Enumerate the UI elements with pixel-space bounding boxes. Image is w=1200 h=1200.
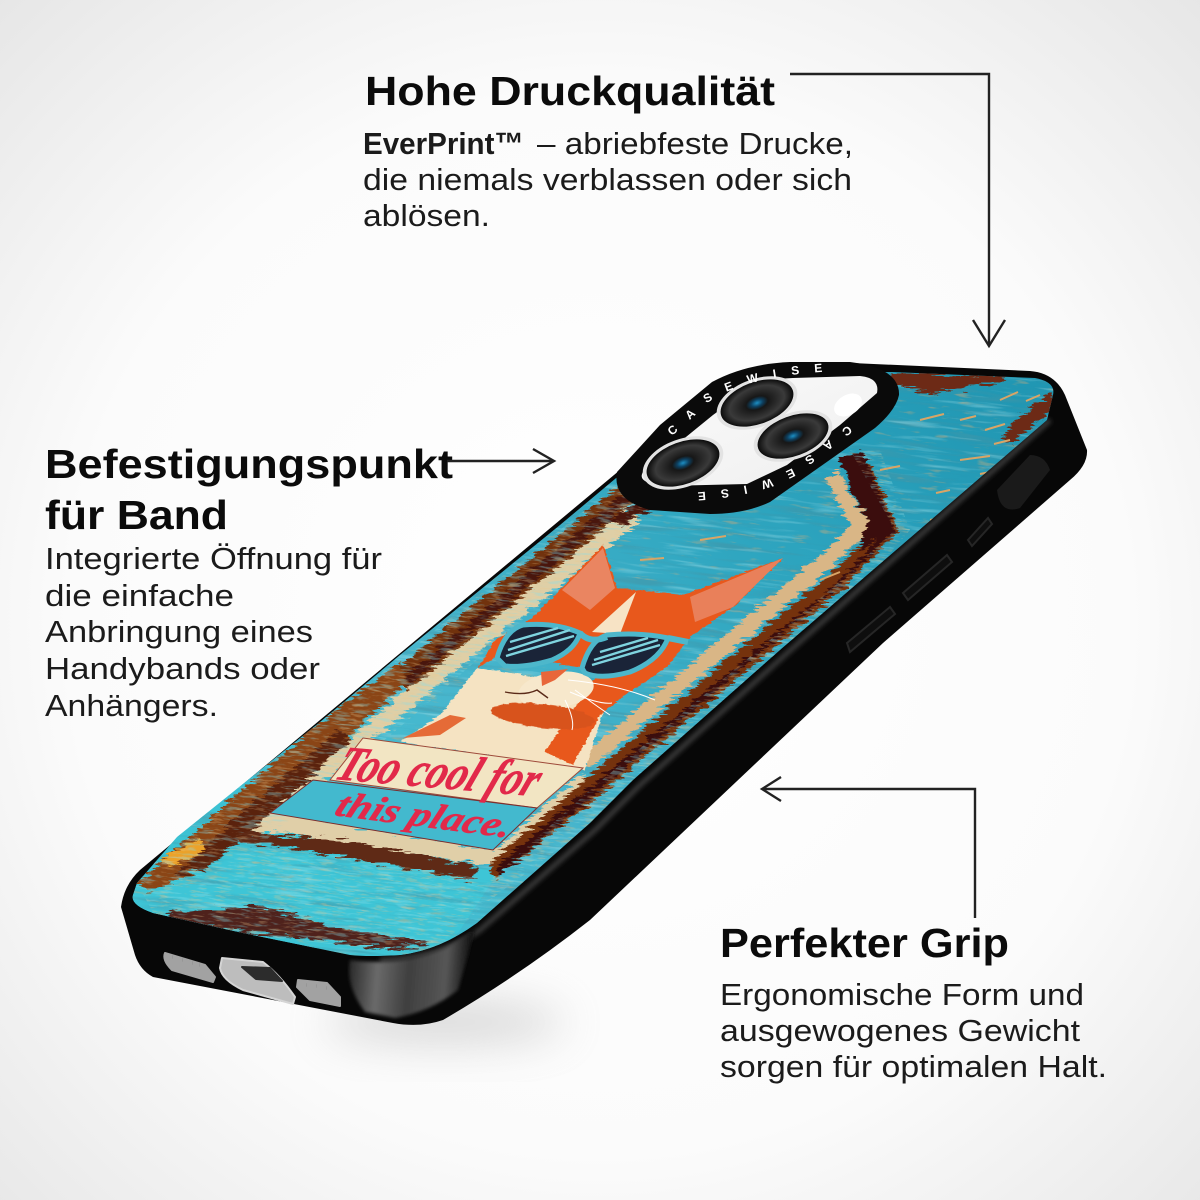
text block: – abriebfeste Drucke, [537,126,853,161]
lens right [747,400,839,472]
arrow: strap attachment [447,449,554,473]
callout: print quality [363,68,853,233]
cat ears light [562,548,615,610]
teal sign panel [270,780,537,850]
sunglasses right lens [582,634,668,676]
text block: sorgen für optimalen Halt. [720,1049,1107,1084]
phone drop shadow [325,1002,565,1042]
tan inner frame [245,505,640,835]
arch rust core [838,449,885,551]
forehead stripe [592,592,636,634]
heading: Perfekter Grip [720,920,1009,966]
arrow: print quality [790,74,1005,346]
callout: strap attachment [45,441,453,723]
ring lettering lower: CASEWISE [698,426,852,500]
shoulder marking [403,715,466,738]
bottom ports [164,953,340,1006]
lower cream frame [240,775,592,866]
cream sign panel [330,738,583,808]
painted teal base [132,372,1054,956]
flash [830,389,866,421]
text block: Ergonomische Form und [720,977,1084,1012]
under-sign rust [240,832,480,880]
bottom rust streak [165,906,430,950]
speaker right [297,980,340,1006]
text block: Handybands oder [45,651,320,686]
glossy corner highlight [349,930,475,1018]
charging port [220,958,295,1004]
printed back face [132,372,1054,956]
chin fur [490,702,595,730]
cat head orange [478,545,783,765]
text block: Integrierte Öffnung für [45,541,382,576]
mouth [505,690,548,698]
top edge rust [890,372,1010,394]
text block: ablösen. [363,198,490,233]
text block [45,541,382,723]
speaker left [164,953,215,982]
sunglasses left lens [497,624,580,666]
cat body white [400,668,610,770]
chipped paint over rust [138,450,910,951]
rust under camera [599,505,652,528]
right rust band [488,462,898,880]
callout: grip [720,920,1107,1084]
text block: Anhängers. [45,688,218,723]
text block [363,126,853,233]
nose [541,669,568,686]
whiskers [565,680,655,730]
rust scratches [640,392,1040,580]
text block: die einfache [45,578,234,613]
heading [45,441,453,538]
upper-left rust band [399,487,633,692]
lens left [635,426,731,500]
cat illustration [400,545,783,770]
arrow: grip [762,777,975,918]
rim highlight [380,420,1050,960]
charging port opening [242,967,282,981]
heading: Befestigungspunkt [45,441,453,487]
text block: ausgewogenes Gewicht [720,1013,1080,1048]
sign line two: this place. [330,784,520,845]
phone case illustration [121,362,1088,1025]
brighter lower paint [132,864,496,956]
heading: Hohe Druckqualität [365,68,775,114]
wide lower-left rust [137,662,408,890]
heading: für Band [45,492,228,538]
lens top [709,366,805,440]
text block [720,977,1107,1084]
camera island [616,362,899,514]
rust frame [137,372,1052,950]
lens reflections [506,628,660,665]
paint streak textures [132,373,1054,956]
side grip buttons [847,455,1050,652]
speaker holes [172,957,326,988]
camera bumper [616,362,899,514]
text block: Anbringung eines [45,614,313,649]
sunglasses bridge and temple [580,633,688,642]
text block: EverPrint™ [363,126,524,161]
case body [121,362,1087,1025]
sign [270,736,583,850]
ring lettering upper: CASEWISE [668,364,822,434]
orange rust flake [160,838,205,866]
camera glass [642,376,877,486]
text block: die niemals verblassen oder sich [363,162,852,197]
muzzle [518,671,594,707]
sign line one: Too cool for [329,736,551,807]
